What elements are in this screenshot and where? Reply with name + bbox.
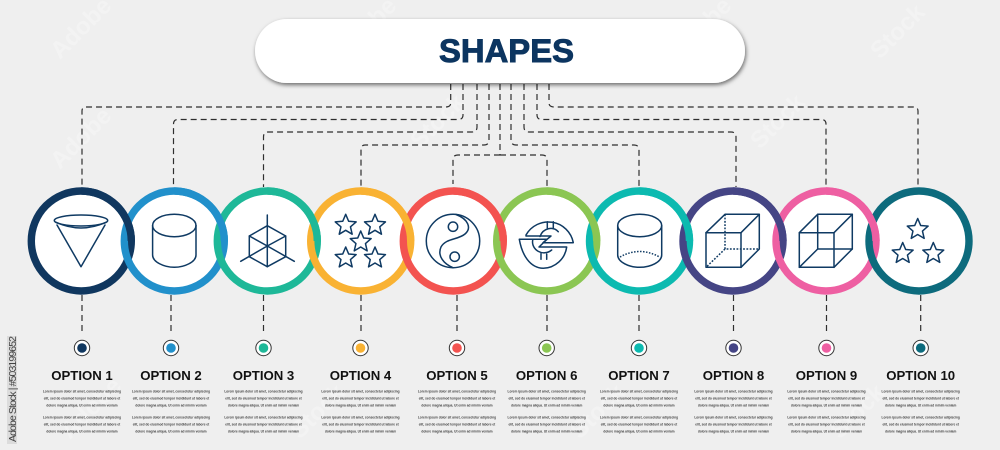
icon: three stars [892,218,944,262]
text 8: dolore magna aliqua. Ut enim ad minim veniam [698,404,769,408]
text 8: elit, sed do eiusmod tempor incididunt ut labore et [695,396,773,400]
marker 5 [449,340,465,356]
text 4: dolore magna aliqua. Ut enim ad minim veniam [325,430,396,434]
text 6 [508,390,586,434]
text 9 [787,390,866,434]
icon: cylinder [153,214,196,267]
ring 7 [590,191,690,291]
ring 8 [683,191,783,291]
icon: five stars [335,214,385,267]
text 2: elit, sed do eiusmod tempor incididunt ut labore et [133,396,210,400]
stem 9 [826,295,828,333]
text 7: Lorem ipsum dolor sit amet, consectetur adipiscing [600,390,678,394]
text 9: Lorem ipsum dolor sit amet, consectetur adipiscing [787,390,866,394]
watermark: Stock [285,378,351,444]
text 6: dolore magna aliqua. Ut enim ad minim veniam [511,430,582,434]
text 5: Lorem ipsum dolor sit amet, consectetur adipiscing [418,390,496,394]
stem 6 [546,295,548,333]
text 8: Lorem ipsum dolor sit amet, consectetur adipiscing [694,416,773,420]
watermark: Adobe [55,372,127,444]
option 3 [217,191,317,434]
watermark: Stock [865,0,931,64]
text 2: Lorem ipsum dolor sit amet, consectetur adipiscing [132,416,210,420]
text 8: dolore magna aliqua. Ut enim ad minim veniam [698,430,769,434]
text 2 [132,390,210,434]
connectors: title to options [82,84,918,187]
text 6: elit, sed do eiusmod tempor incididunt ut labore et [508,396,586,400]
label 6: OPTION 6 [516,368,577,383]
watermark: Adobe [45,102,117,174]
text 6: elit, sed do eiusmod tempor incididunt ut labore et [508,422,586,426]
text 1 [43,390,121,434]
title: SHAPES [439,33,574,69]
text 6: Lorem ipsum dolor sit amet, consectetur adipiscing [508,416,586,420]
ring 1 [31,191,131,291]
option 5 [403,191,503,434]
stem 5 [456,295,458,333]
ring 3 [217,191,317,291]
marker 8 [726,340,741,356]
stem 10 [920,295,922,333]
option 10 [869,191,969,434]
vertical credit: Adobe Stock | #503199652 [7,336,19,442]
watermark: Stock [745,88,811,154]
marker 10 [913,340,928,356]
marker 1 [74,340,90,356]
label 5: OPTION 5 [426,368,488,383]
icon: cone [54,215,108,267]
option 1 [31,191,131,434]
icon: cylinder with dashed base [618,214,662,267]
text 5 [418,390,496,434]
watermark: Stock [825,378,891,444]
text 9: elit, sed do eiusmod tempor incididunt ut labore et [788,422,866,426]
text 4: Lorem ipsum dolor sit amet, consectetur adipiscing [321,390,400,394]
text 2: elit, sed do eiusmod tempor incididunt ut labore et [133,422,210,426]
text 3: elit, sed do eiusmod tempor incididunt ut labore et [225,396,303,400]
text 5: dolore magna aliqua. Ut enim ad minim veniam [421,404,493,408]
text 10 [882,390,960,434]
ring 4 [311,191,411,291]
text 1: elit, sed do eiusmod tempor incididunt ut labore et [44,422,121,426]
text 7: dolore magna aliqua. Ut enim ad minim veniam [603,430,675,434]
circle fills [31,191,969,291]
label 9: OPTION 9 [796,368,857,383]
text 8 [694,390,773,434]
stem 7 [638,295,640,333]
text 5: Lorem ipsum dolor sit amet, consectetur adipiscing [418,416,496,420]
text 10: dolore magna aliqua. Ut enim ad minim veniam [885,430,956,434]
marker 7 [631,340,647,356]
option 8 [683,191,783,434]
text 4 [321,390,400,434]
text 8: elit, sed do eiusmod tempor incididunt ut labore et [695,422,773,426]
marker 9 [819,340,834,356]
text 1: dolore magna aliqua. Ut enim ad minim veniam [46,404,118,408]
ring 6 [497,191,597,291]
label 3: OPTION 3 [233,368,294,383]
label 8: OPTION 8 [703,368,764,383]
text 5: elit, sed do eiusmod tempor incididunt ut labore et [419,422,496,426]
text 9: dolore magna aliqua. Ut enim ad minim veniam [791,404,862,408]
text 1: Lorem ipsum dolor sit amet, consectetur adipiscing [43,390,121,394]
ring 9 [776,191,876,291]
text 7: elit, sed do eiusmod tempor incididunt ut labore et [601,396,678,400]
text 2: dolore magna aliqua. Ut enim ad minim veniam [135,430,207,434]
ring 2 [124,191,224,291]
text 8: Lorem ipsum dolor sit amet, consectetur adipiscing [694,390,773,394]
text 7: elit, sed do eiusmod tempor incididunt ut labore et [601,422,678,426]
option 2 [124,191,224,434]
text 10: Lorem ipsum dolor sit amet, consectetur adipiscing [882,416,960,420]
text 7: dolore magna aliqua. Ut enim ad minim veniam [603,404,675,408]
stem 2 [170,295,172,333]
ring 5 [403,191,503,291]
text 3 [224,390,303,434]
stem 3 [262,295,264,333]
ring 10 [869,191,969,291]
option 6 [497,191,597,434]
title pill [255,19,745,83]
text 4: elit, sed do eiusmod tempor incididunt ut labore et [322,396,400,400]
marker 2 [163,340,179,356]
watermark: Stock [565,378,631,444]
text 2: dolore magna aliqua. Ut enim ad minim veniam [135,404,207,408]
label 7: OPTION 7 [608,368,670,383]
icon: broken coin [519,222,573,268]
text 1: Lorem ipsum dolor sit amet, consectetur adipiscing [43,416,121,420]
stem 8 [732,295,734,333]
option 9 [776,191,876,434]
text 3: elit, sed do eiusmod tempor incididunt ut labore et [225,422,303,426]
text 7 [600,390,678,434]
text 5: elit, sed do eiusmod tempor incididunt ut labore et [419,396,496,400]
text 9: elit, sed do eiusmod tempor incididunt ut labore et [788,396,866,400]
text 4: dolore magna aliqua. Ut enim ad minim veniam [325,404,396,408]
icon: yin yang [426,214,480,268]
text 4: Lorem ipsum dolor sit amet, consectetur adipiscing [321,416,400,420]
text 10: dolore magna aliqua. Ut enim ad minim veniam [885,404,956,408]
marker 6 [539,340,554,356]
ring interlocks [81,191,876,241]
text 2: Lorem ipsum dolor sit amet, consectetur adipiscing [132,390,210,394]
icon: hexagonal wireframe [241,215,294,267]
icon: cube with hidden edges [706,214,759,267]
marker 4 [353,340,368,356]
text 4: elit, sed do eiusmod tempor incididunt ut labore et [322,422,400,426]
watermark: Stock [405,88,471,154]
label 10: OPTION 10 [886,368,955,383]
text 6: dolore magna aliqua. Ut enim ad minim veniam [511,404,582,408]
label 2: OPTION 2 [140,368,202,383]
text 6: Lorem ipsum dolor sit amet, consectetur adipiscing [508,390,586,394]
stem 1 [81,295,83,333]
text 9: dolore magna aliqua. Ut enim ad minim veniam [791,430,862,434]
stem 4 [360,295,362,333]
marker 3 [256,340,271,356]
text 1: dolore magna aliqua. Ut enim ad minim veniam [46,430,118,434]
option 4 [311,191,411,434]
text 1: elit, sed do eiusmod tempor incididunt ut labore et [44,396,121,400]
text 7: Lorem ipsum dolor sit amet, consectetur adipiscing [600,416,678,420]
option 7 [590,191,690,434]
text 3: dolore magna aliqua. Ut enim ad minim veniam [228,430,299,434]
label 4: OPTION 4 [330,368,392,383]
text 5: dolore magna aliqua. Ut enim ad minim veniam [421,430,493,434]
text 3: Lorem ipsum dolor sit amet, consectetur adipiscing [224,416,303,420]
icon: wireframe cube [799,214,852,267]
text 10: Lorem ipsum dolor sit amet, consectetur adipiscing [882,390,960,394]
text 10: elit, sed do eiusmod tempor incididunt ut labore et [882,396,960,400]
text 3: Lorem ipsum dolor sit amet, consectetur adipiscing [224,390,303,394]
label 1: OPTION 1 [51,368,113,383]
text 9: Lorem ipsum dolor sit amet, consectetur adipiscing [787,416,866,420]
text 3: dolore magna aliqua. Ut enim ad minim veniam [228,404,299,408]
text 10: elit, sed do eiusmod tempor incididunt ut labore et [882,422,960,426]
